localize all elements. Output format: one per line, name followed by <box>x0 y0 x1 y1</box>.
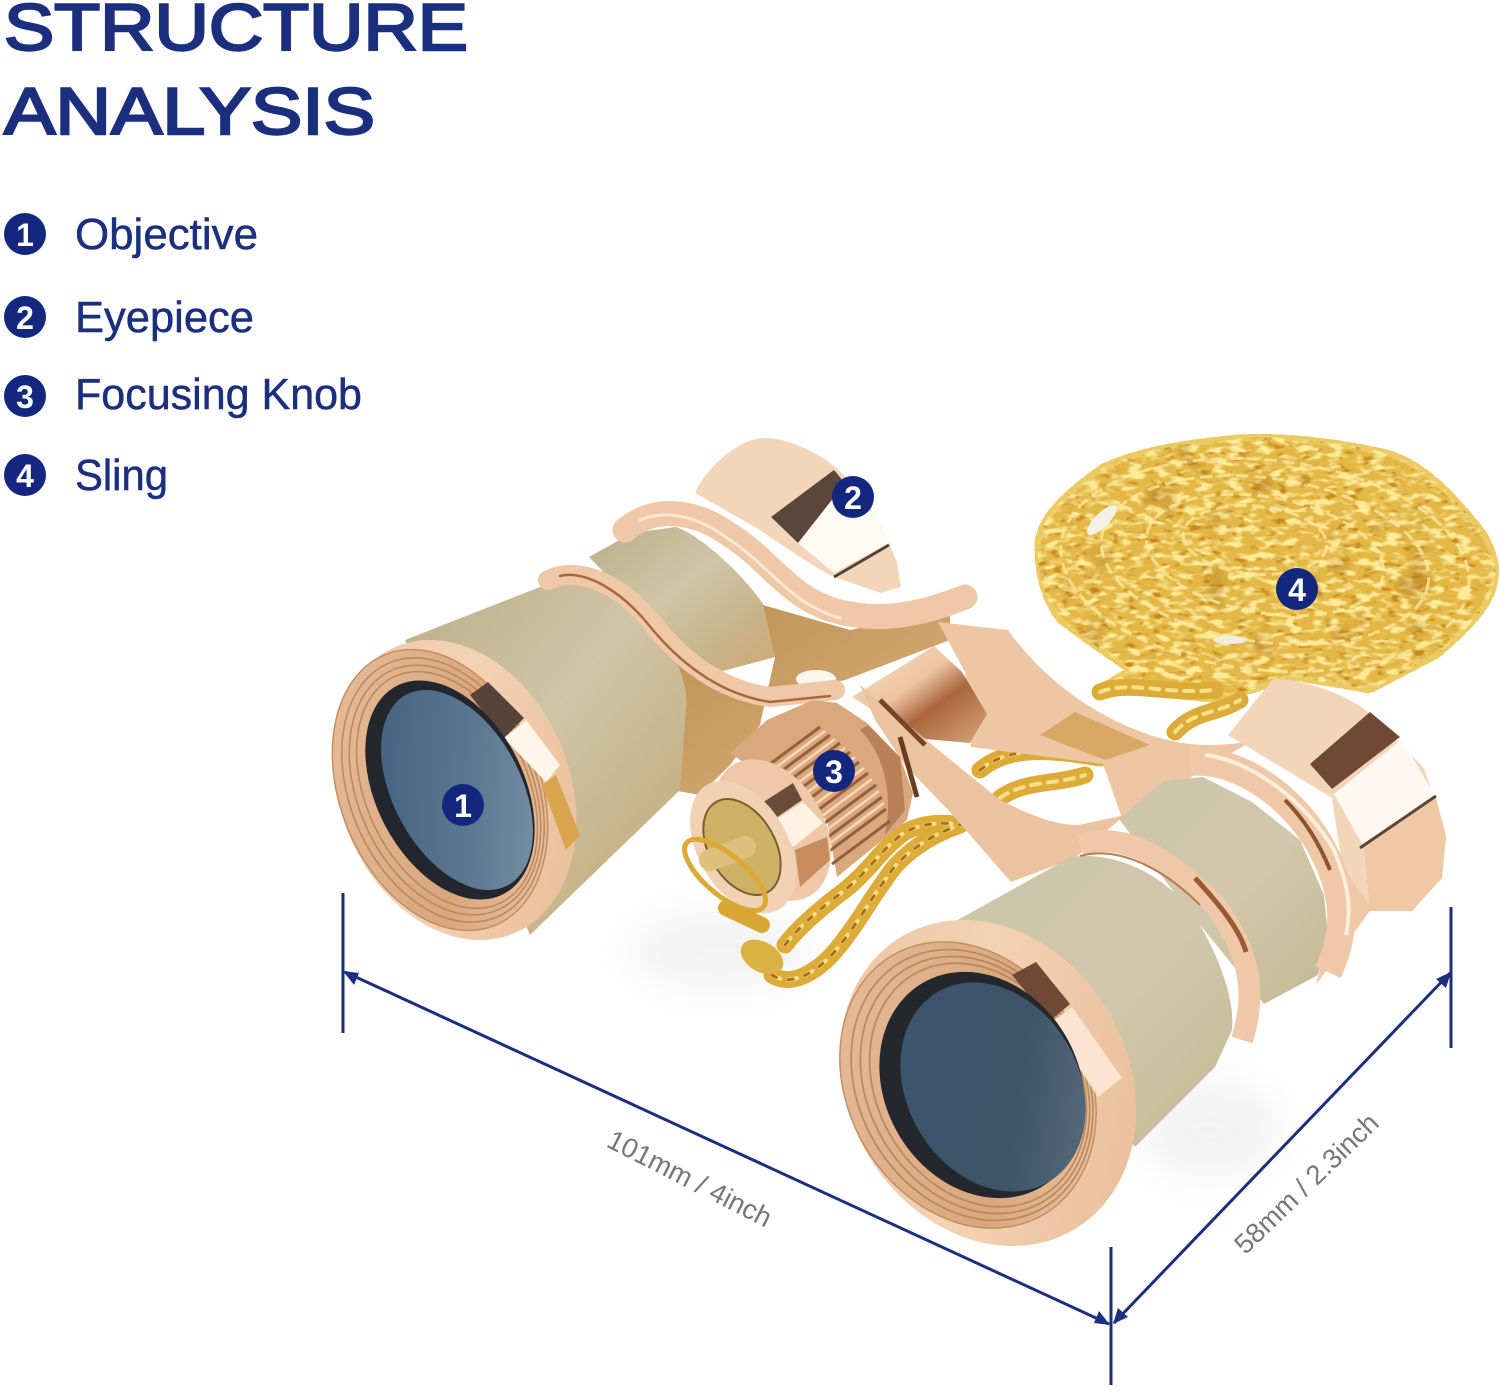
legend item: Sling: 4 <box>16 458 34 494</box>
right rear band <box>1190 755 1349 972</box>
objective lens right assembly <box>782 866 1194 1300</box>
marker 3 <box>813 750 855 792</box>
gold chain sling <box>1030 430 1500 710</box>
title: ANALYSIS <box>4 74 375 148</box>
left front band and lower arm <box>548 575 835 702</box>
right rear collar <box>1316 850 1372 985</box>
legend item: Eyepiece: 2 <box>16 300 34 336</box>
legend item: Focusing Knob: 3 <box>16 379 34 415</box>
left rear barrel <box>589 527 775 673</box>
marker 1 <box>442 784 484 826</box>
marker 3: 3 <box>825 754 843 790</box>
right rear barrel <box>1119 777 1328 1004</box>
objective lens 1 assembly <box>290 603 620 977</box>
marker 1: 1 <box>454 788 472 824</box>
right lower arm <box>860 685 1125 882</box>
callout markers <box>442 476 1318 826</box>
marker 4 <box>1276 568 1318 610</box>
legend item: Sling <box>4 451 168 500</box>
left gold body <box>672 605 950 795</box>
right objective barrel <box>954 856 1232 1147</box>
soft shadow <box>630 910 1280 1180</box>
legend item: Eyepiece: Eyepiece <box>75 293 254 342</box>
marker 4: 4 <box>1288 572 1306 608</box>
marker 2: 2 <box>844 480 862 516</box>
right upper arm <box>938 622 1250 818</box>
legend item: Focusing Knob: Focusing Knob <box>75 370 362 419</box>
left rear band and upper arm <box>625 514 965 618</box>
legend item: Sling: Sling <box>75 451 168 500</box>
dimension: width 58mm <box>1113 907 1451 1324</box>
right eyepiece cup <box>1228 679 1446 911</box>
legend item: Objective: 1 <box>16 217 34 253</box>
focusing knob <box>668 700 917 981</box>
dimension: length 101mm: 101mm / 4inch <box>602 1124 777 1233</box>
left eyepiece cup <box>695 438 901 593</box>
central hinge axle <box>852 646 987 743</box>
legend list <box>4 210 362 500</box>
right front band <box>1080 841 1249 1040</box>
title <box>4 0 468 148</box>
legend item: Objective: Objective <box>75 210 258 259</box>
arm reflection <box>1040 712 1150 760</box>
marker 2 <box>832 476 874 518</box>
chain strands behind the arms <box>772 687 1240 980</box>
dimension: length 101mm <box>343 893 1111 1385</box>
dimension: width 58mm: 58mm / 2.3inch <box>1228 1107 1385 1260</box>
left objective barrel <box>405 583 687 935</box>
